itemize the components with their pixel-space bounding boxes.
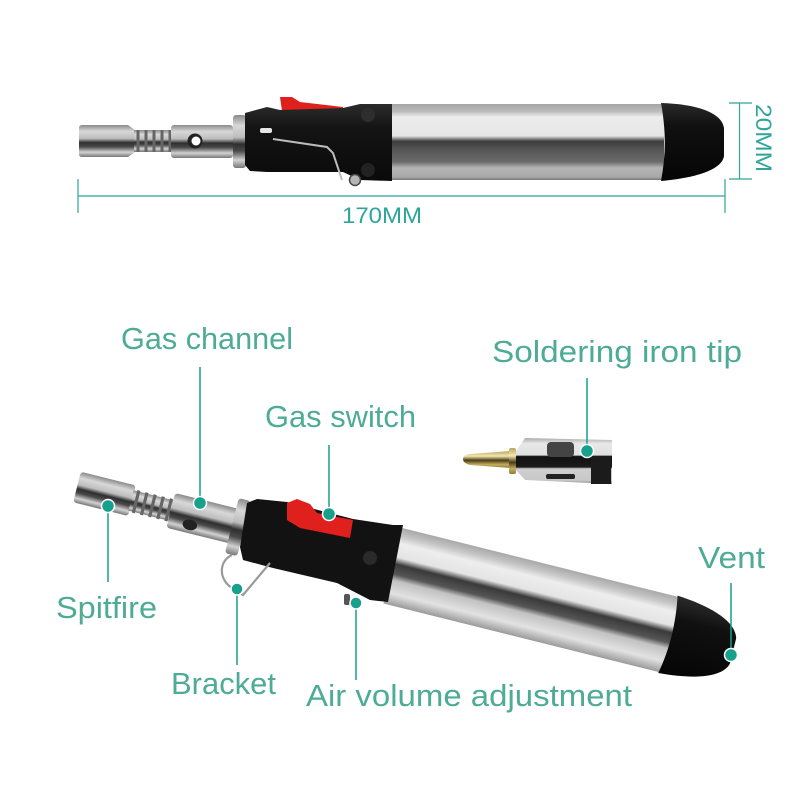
top tool: side view: [79, 97, 724, 186]
label: Soldering iron tip: Soldering iron tip: [492, 334, 742, 369]
red switch: [280, 97, 343, 111]
label: Gas channel: Gas channel: [121, 321, 293, 356]
label: 20MM: 20MM: [751, 104, 776, 172]
silver body: [383, 528, 681, 673]
bottom tool: angled view: [67, 448, 743, 689]
dimension: diameter: [729, 103, 752, 179]
label: Spitfire: Spitfire: [56, 590, 157, 625]
tube with hole: [166, 493, 238, 543]
dimension: length: [78, 179, 725, 213]
bracket wire: [273, 139, 342, 180]
callout dots: [102, 444, 738, 662]
black end cap: [658, 596, 743, 689]
metal parts: [67, 448, 743, 689]
nozzle: [73, 472, 136, 516]
steel barrel: [516, 438, 612, 484]
spring: [128, 489, 176, 522]
collar: [233, 115, 246, 168]
red switch: [287, 499, 353, 538]
black handle: [245, 104, 392, 181]
label: Vent: Vent: [698, 540, 765, 575]
label: Bracket: Bracket: [171, 666, 276, 701]
tube with hole: [171, 125, 233, 158]
spring: [134, 130, 172, 152]
black end cap: [661, 103, 724, 181]
brass ring: [509, 448, 516, 474]
soldering iron tip: [463, 438, 612, 484]
air screw: [350, 174, 360, 186]
label: Air volume adjustment: Air volume adjustment: [306, 678, 632, 713]
air screw: [344, 594, 350, 605]
label: Gas switch: Gas switch: [265, 399, 416, 434]
bracket wire: [222, 555, 270, 595]
black handle: [240, 499, 403, 602]
brass point: [463, 451, 510, 468]
callout lines: [108, 367, 731, 680]
collar: [225, 498, 251, 556]
slots: [546, 442, 611, 484]
nozzle: [79, 125, 135, 157]
silver body: [392, 104, 664, 180]
label: 170MM: 170MM: [342, 203, 422, 228]
